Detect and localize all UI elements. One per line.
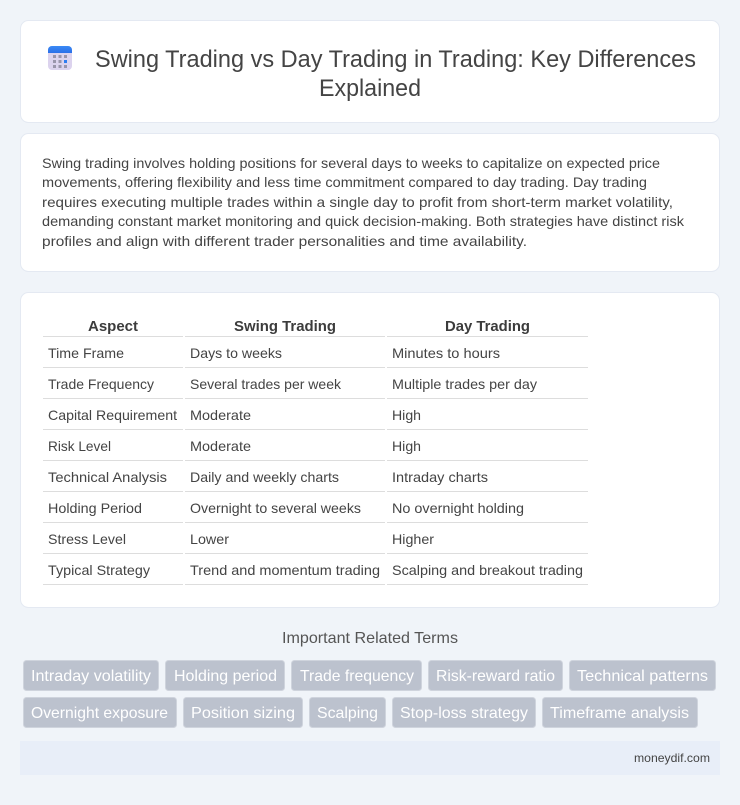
table header (88, 318, 530, 335)
text block: description: profiles and align with different trader personalities and time availability. (42, 233, 527, 249)
tag: scalping: Scalping (317, 705, 378, 722)
heading: important related terms: Important Related Terms (282, 630, 458, 647)
tag: risk-reward ratio (428, 660, 562, 690)
table row: time frame: Days to weeks (190, 345, 282, 361)
table row: time frame (48, 345, 500, 361)
table row: time frame: Time Frame (48, 345, 124, 361)
table row: typical strategy: Typical Strategy (48, 562, 150, 578)
table row: risk level (48, 438, 421, 454)
table row: technical analysis: Intraday charts (392, 469, 488, 485)
tag: holding period: Holding period (174, 668, 277, 685)
table row: typical strategy: Scalping and breakout trading (392, 562, 583, 578)
table row: technical analysis (48, 469, 488, 485)
title: Swing Trading vs Day Trading in Trading: Key Differences (95, 46, 696, 73)
table row: risk level: Moderate (190, 438, 251, 454)
table row lines (43, 336, 588, 585)
table row: technical analysis: Daily and weekly charts (190, 469, 339, 485)
tag: position sizing: Position sizing (191, 705, 295, 722)
text block: description (42, 155, 685, 249)
icon: calendar (48, 46, 72, 70)
table row: trade frequency: Trade Frequency (48, 376, 154, 392)
table row: stress level: Stress Level (48, 531, 126, 547)
table header: Swing Trading (234, 318, 336, 335)
text block: description: requires executing multiple trades within a single day to profit from short-term market volatility, (42, 194, 673, 210)
table row: time frame: Minutes to hours (392, 345, 500, 361)
panel: description card (20, 134, 720, 272)
table row: risk level: Risk Level (48, 438, 111, 454)
table row: stress level: Lower (190, 531, 229, 547)
table row: technical analysis: Technical Analysis (48, 469, 167, 485)
tag: risk-reward ratio: Risk-reward ratio (436, 668, 555, 685)
tag: holding period (166, 660, 284, 690)
text block: description: movements, offering flexibility and less time commitment compared to day trading. Day trading (42, 174, 647, 190)
title: Explained (319, 75, 421, 102)
table header: Aspect (88, 318, 138, 335)
tag: technical patterns: Technical patterns (577, 668, 708, 685)
footer bar (20, 741, 720, 775)
table row: holding period: Overnight to several weeks (190, 500, 361, 516)
table row: capital requirement: High (392, 407, 421, 423)
tag: trade frequency (292, 660, 422, 690)
tag: overnight exposure: Overnight exposure (31, 705, 168, 722)
title (95, 46, 696, 102)
table row: risk level: High (392, 438, 421, 454)
tag: scalping (310, 698, 386, 728)
tag: intraday volatility: Intraday volatility (31, 668, 151, 685)
tag: intraday volatility (24, 660, 158, 690)
tag: technical patterns (570, 660, 716, 690)
table row: trade frequency (48, 376, 537, 392)
table row: capital requirement (48, 407, 421, 423)
table row: typical strategy (48, 562, 583, 578)
text block: description: demanding constant market monitoring and quick decision-making. Both strategies have distinct risk (42, 213, 685, 229)
panel: header card (20, 20, 720, 122)
footer bar: moneydif.com (634, 751, 710, 765)
tag: stop-loss strategy: Stop-loss strategy (400, 705, 528, 722)
tag: timeframe analysis: Timeframe analysis (550, 705, 689, 722)
panel: comparison table (20, 292, 720, 608)
table row: holding period: Holding Period (48, 500, 142, 516)
table row: stress level: Higher (392, 531, 434, 547)
tag: overnight exposure (24, 698, 176, 728)
table header: Day Trading (445, 318, 530, 335)
tag: trade frequency: Trade frequency (300, 668, 414, 685)
table row: trade frequency: Multiple trades per day (392, 376, 537, 392)
table row: capital requirement: Moderate (190, 407, 251, 423)
table row: trade frequency: Several trades per week (190, 376, 342, 392)
table row: stress level (48, 531, 434, 547)
tag: stop-loss strategy (392, 698, 536, 728)
table row: holding period (48, 500, 524, 516)
text block: description: Swing trading involves holding positions for several days to weeks to capitalize on expected price (42, 155, 660, 171)
table row: typical strategy: Trend and momentum trading (190, 562, 380, 578)
tags: related terms (24, 660, 716, 728)
table row: capital requirement: Capital Requirement (48, 407, 177, 423)
table row: holding period: No overnight holding (392, 500, 524, 516)
tag: position sizing (184, 698, 302, 728)
tag: timeframe analysis (542, 698, 698, 728)
